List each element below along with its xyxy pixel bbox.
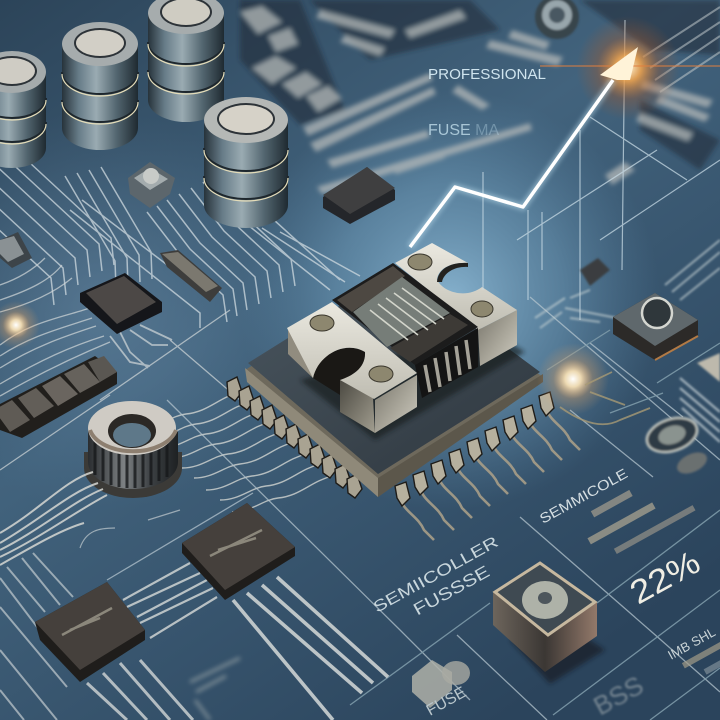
right module chip xyxy=(613,293,698,360)
main chip package xyxy=(227,268,554,506)
label: semiconductor fuse: SEMIICOLLER xyxy=(371,534,501,616)
heading text: professional: PROFESSIONAL xyxy=(428,66,546,83)
capacitor stack D xyxy=(204,97,288,228)
chip top face xyxy=(248,268,540,474)
right edge scored lines xyxy=(643,7,720,92)
right panel text marks xyxy=(535,240,720,328)
chip pins: left edge xyxy=(227,377,362,498)
wire bundle: left of nut xyxy=(0,472,107,565)
glow: right of chip xyxy=(537,343,609,415)
label: semiconductor fuse xyxy=(371,534,512,636)
label: bottom right large figure: BSS xyxy=(588,670,648,720)
capacitor stack A xyxy=(0,51,46,168)
label: bottom fuse logo xyxy=(412,660,470,719)
blurred components: top right xyxy=(240,0,720,194)
circuit traces: upper left fan xyxy=(0,150,360,328)
label: bottom right spec text xyxy=(665,618,720,686)
central housing xyxy=(332,263,478,398)
circuit traces: around left glow xyxy=(0,258,240,470)
capacitor stack C xyxy=(148,0,224,122)
stat: 22 percent: 22% xyxy=(623,543,706,611)
transistor: bottom left xyxy=(35,582,193,720)
wires: lower left diagonals xyxy=(0,510,180,720)
fuse shadow xyxy=(300,330,525,440)
label: semiconductor spec panel: SEMMICOLE xyxy=(537,465,630,527)
label: semiconductor fuse: FUSSSE xyxy=(410,562,493,619)
capacitor stack B xyxy=(62,22,138,150)
small dark part xyxy=(580,258,610,286)
chip rim xyxy=(245,272,543,497)
chip pins: right edge xyxy=(395,392,554,506)
glow: left of board xyxy=(0,301,40,349)
right terminal xyxy=(395,243,517,366)
blurred mark: bottom xyxy=(190,658,240,720)
block resistor array: left xyxy=(0,356,117,438)
label: bottom fuse logo: FUSE xyxy=(424,684,469,719)
ring component: top right xyxy=(535,0,579,39)
panel grid lines xyxy=(107,297,720,720)
gold wavy trace xyxy=(560,372,650,424)
small metal component xyxy=(128,162,175,208)
connector: small chip strip xyxy=(160,250,222,302)
transistor: bottom centre xyxy=(123,503,388,720)
fuse component xyxy=(287,243,525,440)
dark chip: upper centre xyxy=(323,167,395,224)
growth arrow xyxy=(410,16,720,247)
threaded ring nut xyxy=(84,401,182,498)
circuit traces: left of chip xyxy=(140,392,332,512)
right side details xyxy=(642,353,720,478)
black chip: left xyxy=(80,273,162,334)
metal cube component xyxy=(493,563,605,684)
left terminal xyxy=(287,302,417,433)
heading text: fuse maker: FUSE MA xyxy=(428,122,499,139)
circuit traces: below chip xyxy=(400,408,580,540)
growth chart grid lines xyxy=(483,20,720,320)
label: semiconductor spec panel xyxy=(537,445,696,578)
label: bottom right spec text: IMB SHL xyxy=(665,624,718,663)
arrow glow xyxy=(576,16,680,120)
small chip: far left xyxy=(0,232,32,268)
